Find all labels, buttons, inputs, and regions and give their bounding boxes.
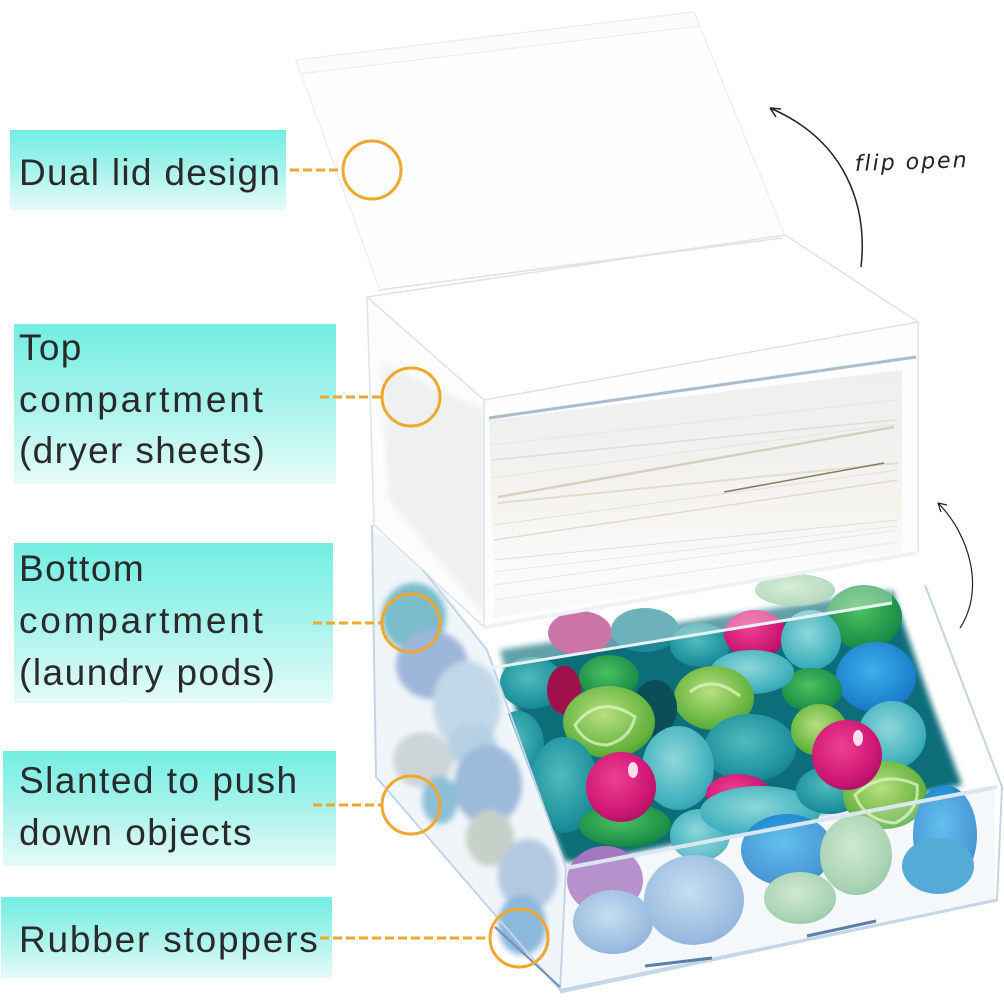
left frosted pods [382, 583, 558, 955]
top compartment acrylic box [367, 235, 918, 627]
acrylic floor and left wall wash [372, 530, 566, 990]
label: top compartment: (dryer sheets) [19, 430, 266, 471]
frosted band under upper box [491, 552, 892, 668]
label: rubber stoppers [1, 897, 332, 978]
open lid [296, 12, 785, 290]
label: bottom compartment: (laundry pods) [19, 652, 277, 693]
flip open label: flip open [854, 148, 969, 177]
bottom compartment pods [372, 530, 995, 990]
label: top compartment: Top [19, 327, 83, 368]
bottom compartment acrylic box [372, 525, 1002, 992]
pink pod balls [586, 752, 656, 822]
label: dual lid design: Dual lid design [19, 152, 281, 193]
label: slanted [3, 751, 336, 866]
callout markers and leader lines [290, 141, 548, 967]
marker: bottom compartment [313, 594, 440, 652]
label: top compartment [14, 324, 336, 484]
marker: slanted [313, 776, 440, 834]
top compartment side wall and paper stack [367, 297, 918, 628]
label: slanted: Slanted to push [19, 760, 299, 801]
label: slanted: down objects [19, 812, 253, 853]
marker: rubber stoppers [320, 909, 548, 967]
marker: top compartment [320, 368, 440, 426]
label: bottom compartment: compartment [19, 600, 266, 641]
front wall wash [560, 787, 995, 990]
label: top compartment: compartment [19, 378, 266, 420]
label: rubber stoppers: Rubber stoppers [19, 919, 320, 960]
pod highlights [575, 684, 917, 823]
label: dual lid design [10, 130, 286, 210]
pod cluster [492, 574, 977, 954]
marker: dual lid [290, 141, 401, 199]
small curved arrow [938, 503, 973, 628]
product illustration [290, 11, 1003, 994]
flip open arrow [770, 108, 862, 267]
label: bottom compartment [14, 543, 333, 703]
label: bottom compartment: Bottom [19, 548, 145, 589]
